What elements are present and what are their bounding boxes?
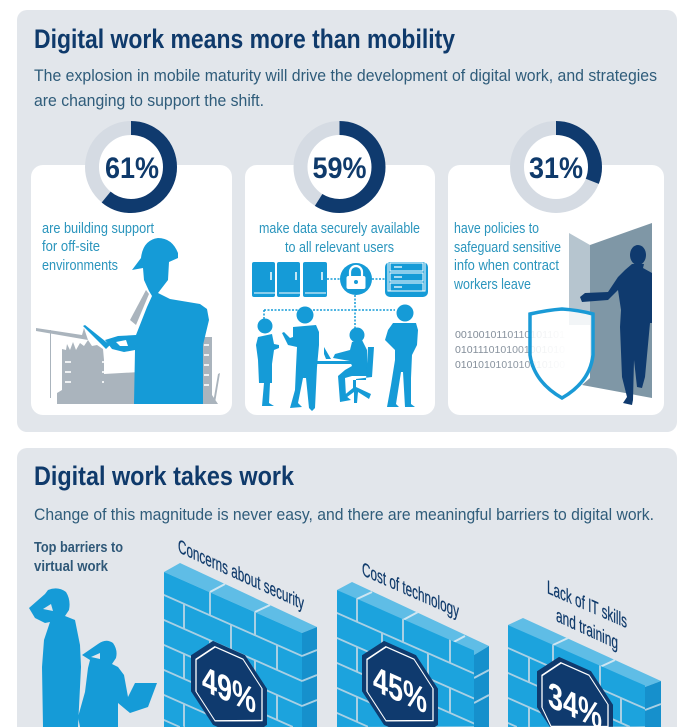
figure: man with tablet	[282, 306, 319, 411]
figure: worker with tablet	[83, 238, 209, 404]
label: top barriers to virtual work: virtual work	[34, 559, 109, 575]
figures: people looking at walls	[29, 588, 157, 727]
illustration: construction site	[36, 290, 220, 404]
card: safeguard sensitive info	[448, 128, 664, 415]
label line: lack of IT skills: Lack of IT skills	[547, 577, 627, 633]
icon: padlock	[340, 263, 372, 295]
donut: 31%: 31%	[529, 152, 583, 185]
figure: person with laptop	[78, 641, 157, 727]
figure: man with folded arms	[385, 304, 418, 407]
donut: 31%	[517, 128, 595, 206]
card: data securely available	[245, 128, 435, 415]
label: concerns about security: Concerns about security	[178, 536, 304, 615]
icon: dots on building	[65, 345, 209, 385]
text: have policies: safeguard sensitive	[454, 240, 561, 256]
sign: 34%	[537, 647, 613, 727]
text: make data securely available: to all relevant users	[285, 240, 394, 256]
wall: lack of IT skills and training	[508, 577, 661, 727]
binary data text: 0010010110110101101	[455, 329, 565, 341]
sign: 45%	[362, 631, 438, 727]
text: have policies: workers leave	[453, 277, 531, 293]
text: are building support: environments	[42, 258, 118, 274]
intro text: Change of this magnitude is never easy, and there are meaningful barriers to digital work.	[34, 505, 654, 524]
sign: 49%	[191, 631, 267, 727]
icon: server rack	[385, 262, 428, 297]
panel: digital work means more than mobility	[17, 10, 677, 432]
donut: 61%: 61%	[105, 152, 159, 185]
figure: seated woman at laptop	[315, 328, 374, 403]
binary data text: 0101110101001001010	[455, 344, 565, 356]
illustration: open door	[569, 223, 652, 398]
text: have policies: info when contract	[454, 258, 559, 274]
icon: shield	[530, 309, 593, 398]
card: off-site environments	[31, 128, 232, 415]
intro text: are changing to support the shift.	[34, 91, 264, 110]
panel: digital work takes work	[17, 448, 677, 727]
heading: digital work means more than mobility: Digital work means more than mobility	[34, 24, 455, 54]
figure: man shading eyes	[29, 588, 81, 727]
figure: man leaving through door	[580, 245, 652, 405]
intro text: The explosion in mobile maturity will drive the development of digital work, and strategies	[34, 66, 657, 85]
donut: 61%	[92, 128, 170, 206]
figure: woman with tablet	[256, 318, 279, 406]
label: cost of technology: Cost of technology	[362, 559, 459, 623]
text: make data securely available: make data securely available	[259, 221, 420, 237]
wall: concerns about security	[164, 536, 317, 727]
label line: and training: and training	[556, 605, 618, 654]
text: are building support: are building support	[42, 221, 154, 237]
binary data text: 0101010101010010100	[455, 359, 565, 371]
text: are building support: for off-site	[42, 239, 100, 255]
heading: digital work takes work: Digital work takes work	[34, 461, 295, 491]
network dotted connectors	[264, 279, 395, 335]
label: top barriers to virtual work: Top barriers to	[34, 540, 123, 556]
wall: cost of technology	[337, 559, 489, 727]
donut: 59%: 59%	[312, 152, 366, 185]
text: have policies: have policies to	[454, 221, 539, 237]
donut: 59%	[300, 128, 378, 206]
figures: team of users	[256, 304, 418, 411]
icon: storage cabinets	[252, 262, 327, 297]
